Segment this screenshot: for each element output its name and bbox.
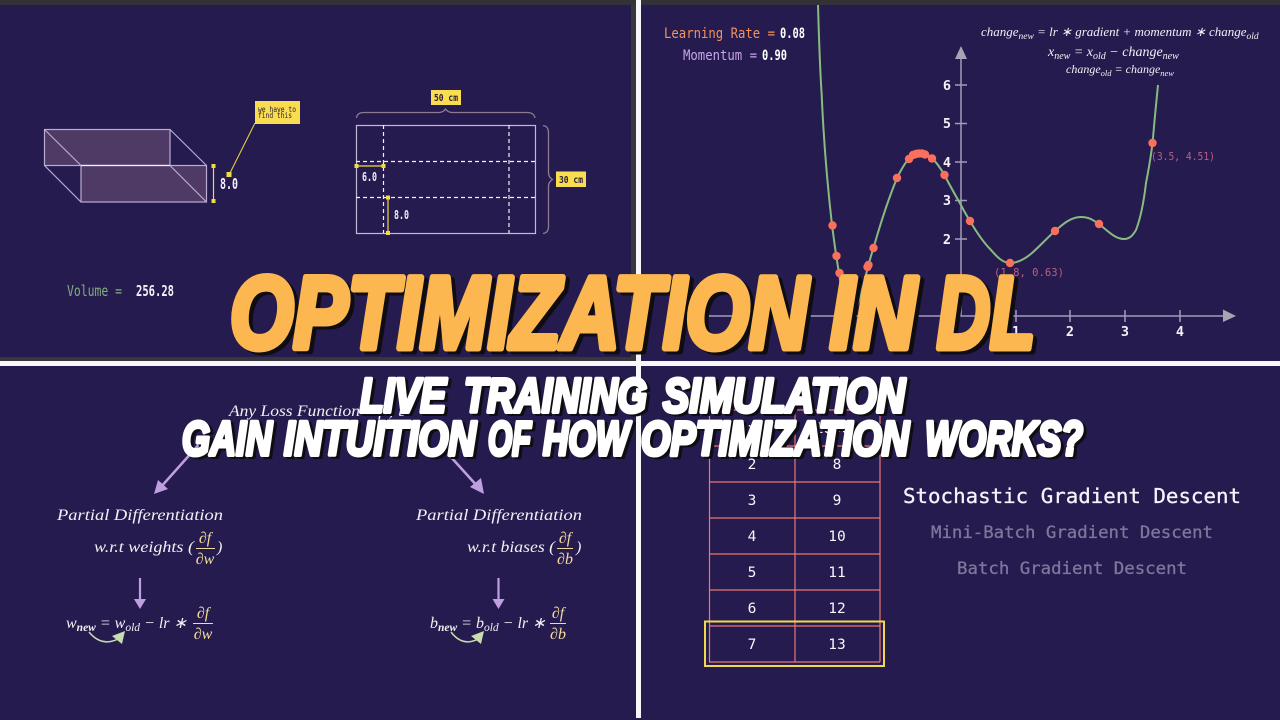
training points	[828, 139, 1157, 277]
axis numbers: 4	[1176, 324, 1184, 340]
momentum equations	[981, 24, 1259, 78]
subtitle: TRAINING	[464, 370, 647, 423]
left derivation: )	[216, 539, 222, 556]
left derivation: w.r.t weights (	[94, 539, 196, 556]
brace: 50 cm: 50 cm	[434, 93, 458, 104]
learning rate and momentum labels: 0.90	[762, 48, 787, 64]
point coordinate labels	[994, 150, 1215, 279]
gradient descent variants	[903, 484, 1241, 579]
data table: 6	[748, 601, 756, 617]
learning rate and momentum labels: Momentum =	[683, 48, 757, 64]
data table: label	[815, 421, 859, 437]
volume readout	[67, 282, 174, 300]
momentum equations: new	[1160, 68, 1174, 78]
volume readout: 256.28	[136, 282, 174, 300]
panel: momentum chart	[664, 5, 1259, 340]
data table: 9	[833, 493, 841, 509]
data table: x	[748, 421, 757, 437]
left derivation: ∂f	[197, 605, 212, 622]
callout: we have to find this: we have to	[258, 105, 296, 114]
learning rate and momentum labels	[664, 26, 805, 64]
title: DL	[937, 256, 1035, 370]
momentum equations: = change	[1112, 62, 1161, 76]
subtitle	[182, 370, 1083, 466]
height marker	[212, 164, 238, 203]
panel: box volume	[44, 90, 586, 300]
volume readout: Volume =	[67, 282, 122, 300]
axis numbers: 3	[943, 193, 951, 209]
right derivation: ∂b	[550, 626, 566, 643]
data table: 3	[748, 493, 756, 509]
left derivation: ∂w	[194, 626, 213, 643]
momentum equations: old	[1101, 68, 1112, 78]
axis numbers: 5	[943, 116, 951, 132]
gradient descent variants: Stochastic Gradient Descent	[903, 484, 1241, 508]
left derivation: ∂w	[196, 551, 215, 568]
left derivation: old	[125, 622, 140, 634]
title: OPTIMIZATION	[230, 256, 810, 370]
loss function heading	[228, 403, 408, 420]
right derivation: old	[484, 622, 499, 634]
left derivation: ∂f	[199, 530, 214, 547]
subtitle: HOW	[543, 413, 632, 466]
height marker: 8.0	[220, 175, 238, 193]
momentum equations: change	[1066, 62, 1101, 76]
callout: we have to find this: find this	[258, 111, 292, 120]
learning rate and momentum labels: 0.08	[780, 26, 805, 42]
momentum equations: old	[1093, 51, 1107, 62]
highlighted row	[705, 622, 884, 666]
brace: 50 cm	[356, 90, 535, 118]
axis numbers: 3	[1121, 324, 1129, 340]
branch arrow right	[450, 456, 484, 494]
axis numbers: 2	[1066, 324, 1074, 340]
data table: 11	[828, 565, 846, 581]
data table: 10	[828, 529, 846, 545]
left derivation: w	[66, 615, 77, 632]
unfolded sheet diagram	[354, 125, 536, 235]
data table: 7	[748, 637, 756, 653]
left derivation	[56, 507, 223, 644]
gradient descent variants: Batch Gradient Descent	[957, 559, 1187, 579]
subtitle: LIVE	[360, 370, 448, 423]
axis numbers: 6	[943, 78, 951, 94]
loss function heading: Any Loss Function	[228, 403, 360, 420]
momentum equations: = lr ∗ gradient + momentum ∗ change	[1034, 24, 1247, 39]
momentum equations: x	[1048, 45, 1054, 60]
right derivation: )	[575, 539, 581, 556]
data table: 8	[833, 457, 841, 473]
unfolded sheet diagram: 8.0	[394, 208, 409, 222]
right derivation: = b	[457, 615, 484, 632]
data table	[709, 410, 880, 662]
subtitle: OF	[488, 413, 532, 466]
branch arrow left	[154, 432, 210, 494]
data table: 5	[748, 565, 756, 581]
learning rate and momentum labels: Learning Rate =	[664, 26, 775, 42]
left derivation: Partial Differentiation	[56, 507, 223, 524]
right derivation: new	[438, 622, 458, 634]
left derivation: = w	[96, 615, 126, 632]
right derivation: ∂b	[557, 551, 573, 568]
left derivation: − lr ∗	[140, 615, 187, 632]
axis numbers: 4	[943, 155, 951, 171]
brace: 30 cm	[543, 126, 586, 234]
momentum equations: old	[1246, 32, 1259, 42]
panel: data table and gradient descent variants	[705, 410, 1241, 666]
callout: we have to find this	[226, 101, 300, 177]
subtitle: WORKS?	[925, 413, 1083, 466]
point coordinate labels: (1.8, 0.63)	[994, 266, 1064, 279]
axis numbers	[943, 78, 1184, 340]
right derivation: ∂f	[552, 605, 567, 622]
axes	[700, 46, 1236, 322]
right derivation: b	[430, 615, 438, 632]
data table: 12	[828, 601, 846, 617]
data table: 4	[748, 529, 757, 545]
unfolded sheet diagram: 6.0	[362, 170, 377, 184]
icon: 3D open box	[44, 130, 206, 202]
data table: 13	[828, 637, 846, 653]
left derivation: new	[77, 622, 96, 634]
momentum equations: new	[1163, 51, 1179, 62]
subtitle: INTUITION	[284, 413, 477, 466]
momentum equations: new	[1019, 32, 1035, 42]
right derivation: − lr ∗	[499, 615, 546, 632]
loss curve	[818, 5, 1158, 314]
right derivation: w.r.t biases (	[467, 539, 557, 556]
momentum equations: change	[981, 24, 1019, 39]
right derivation: ∂f	[559, 530, 574, 547]
brace: 30 cm: 30 cm	[559, 175, 583, 186]
loss function heading: f , b	[378, 403, 408, 420]
axis numbers: 1	[1012, 324, 1020, 340]
momentum equations: new	[1054, 51, 1071, 62]
title: IN	[830, 256, 918, 370]
subtitle: OPTIMIZATION	[641, 413, 910, 466]
subtitle: GAIN	[182, 413, 273, 466]
right derivation	[415, 507, 582, 644]
right derivation: Partial Differentiation	[415, 507, 582, 524]
momentum equations: − change	[1106, 45, 1163, 60]
momentum equations: = x	[1070, 45, 1094, 60]
panel: gradient update	[56, 403, 582, 644]
subtitle: SIMULATION	[663, 370, 906, 423]
axis numbers: 2	[943, 232, 951, 248]
data table: 2	[748, 457, 756, 473]
point coordinate labels: (3.5, 4.51)	[1151, 150, 1215, 163]
gradient descent variants: Mini-Batch Gradient Descent	[931, 523, 1213, 543]
